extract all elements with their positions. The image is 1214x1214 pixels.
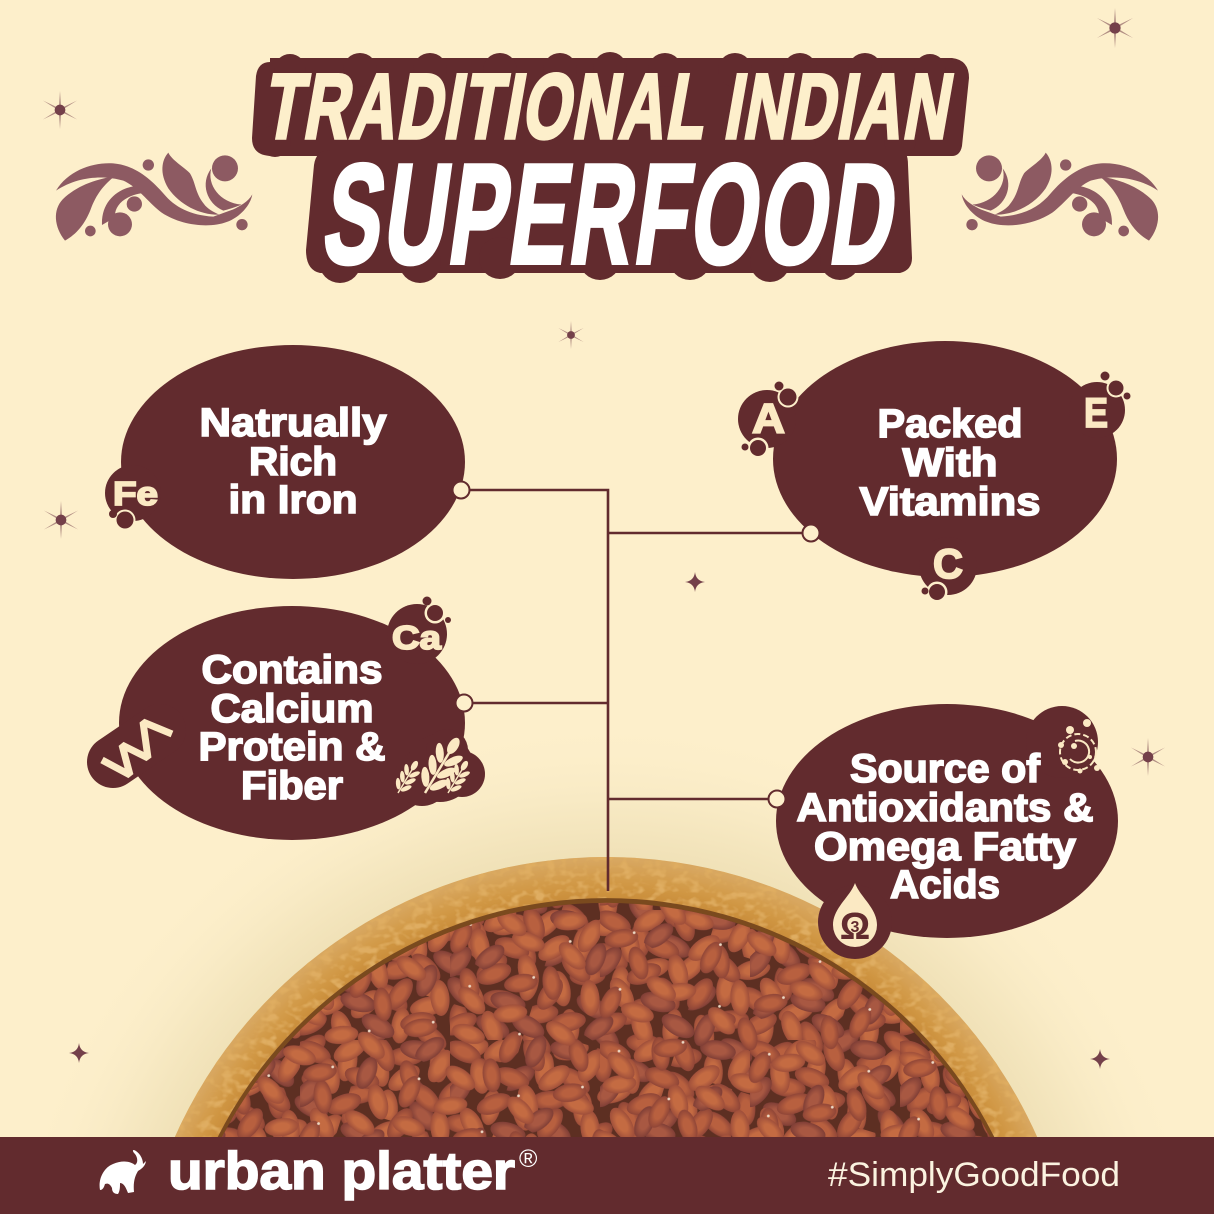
- icon: omega 3 drop: 3: [851, 919, 860, 936]
- badge: Fe: Fe: [113, 475, 158, 512]
- connector dot: antioxidants: [768, 790, 786, 808]
- grains: [222, 903, 990, 1137]
- heading: vitamins: With: [902, 441, 998, 485]
- icon: omega 3 drop: [818, 883, 892, 959]
- panel: vitamins: [738, 341, 1130, 602]
- heading: calcium protein fiber: Fiber: [241, 764, 343, 808]
- icon: elephant logo: [100, 1150, 146, 1194]
- bowl shadow glow: [0, 720, 1214, 1137]
- badge: Fe: [105, 465, 161, 530]
- connector dot: calcium: [456, 694, 472, 712]
- icon: omega 3 drop: Ω: [840, 906, 870, 948]
- heading: antioxidants omega: Source of: [850, 747, 1041, 791]
- connector lines: [470, 490, 802, 891]
- heading: iron: [200, 401, 387, 522]
- panel: calcium protein fiber: [102, 596, 485, 840]
- heading: calcium protein fiber: [198, 648, 386, 808]
- badge: E: [1069, 372, 1130, 438]
- title outline shape: [252, 52, 969, 283]
- connector dot: vitamins: [802, 524, 820, 542]
- heading: iron: Rich: [249, 440, 337, 484]
- icon: antioxidant molecule: [1026, 706, 1100, 778]
- title: [252, 52, 969, 294]
- badge: E: E: [1084, 389, 1108, 436]
- hashtag: #SimplyGoodFood: [828, 1156, 1120, 1194]
- heading: antioxidants omega: Acids: [890, 863, 1000, 907]
- badge: C: [919, 537, 977, 602]
- heading: calcium protein fiber: Calcium: [210, 687, 374, 731]
- heading: antioxidants omega: [796, 747, 1094, 907]
- panel: antioxidants omega: [768, 704, 1118, 959]
- heading: calcium protein fiber: Protein &: [198, 725, 386, 769]
- registered mark: ®: [519, 1145, 538, 1173]
- badge: Ca: Ca: [392, 619, 442, 656]
- heading: vitamins: Vitamins: [860, 480, 1040, 524]
- panel: iron: [105, 345, 470, 579]
- icon: fiber ribbon: [102, 722, 172, 775]
- badge: A: A: [752, 395, 785, 442]
- badge: A: [738, 382, 798, 458]
- heading: calcium protein fiber: Contains: [202, 648, 382, 692]
- connector dot: iron: [452, 482, 470, 498]
- heading: vitamins: Packed: [878, 402, 1022, 446]
- brand name: urban platter: [168, 1142, 515, 1201]
- right flourish: [962, 153, 1158, 241]
- heading: iron: Natrually: [200, 401, 387, 445]
- badge: Ca: [387, 596, 451, 664]
- badge: C: C: [933, 540, 963, 587]
- wooden bowl with millet grains: [175, 857, 1037, 1137]
- heading: antioxidants omega: Omega Fatty: [814, 825, 1077, 869]
- icon: wheat: [390, 729, 485, 806]
- heading: iron: in Iron: [228, 478, 358, 522]
- left flourish: [56, 153, 252, 241]
- bowl rim: [175, 857, 1037, 1137]
- heading: antioxidants omega: Antioxidants &: [796, 786, 1094, 830]
- footer band: [0, 1137, 1214, 1214]
- heading: vitamins: [860, 402, 1040, 524]
